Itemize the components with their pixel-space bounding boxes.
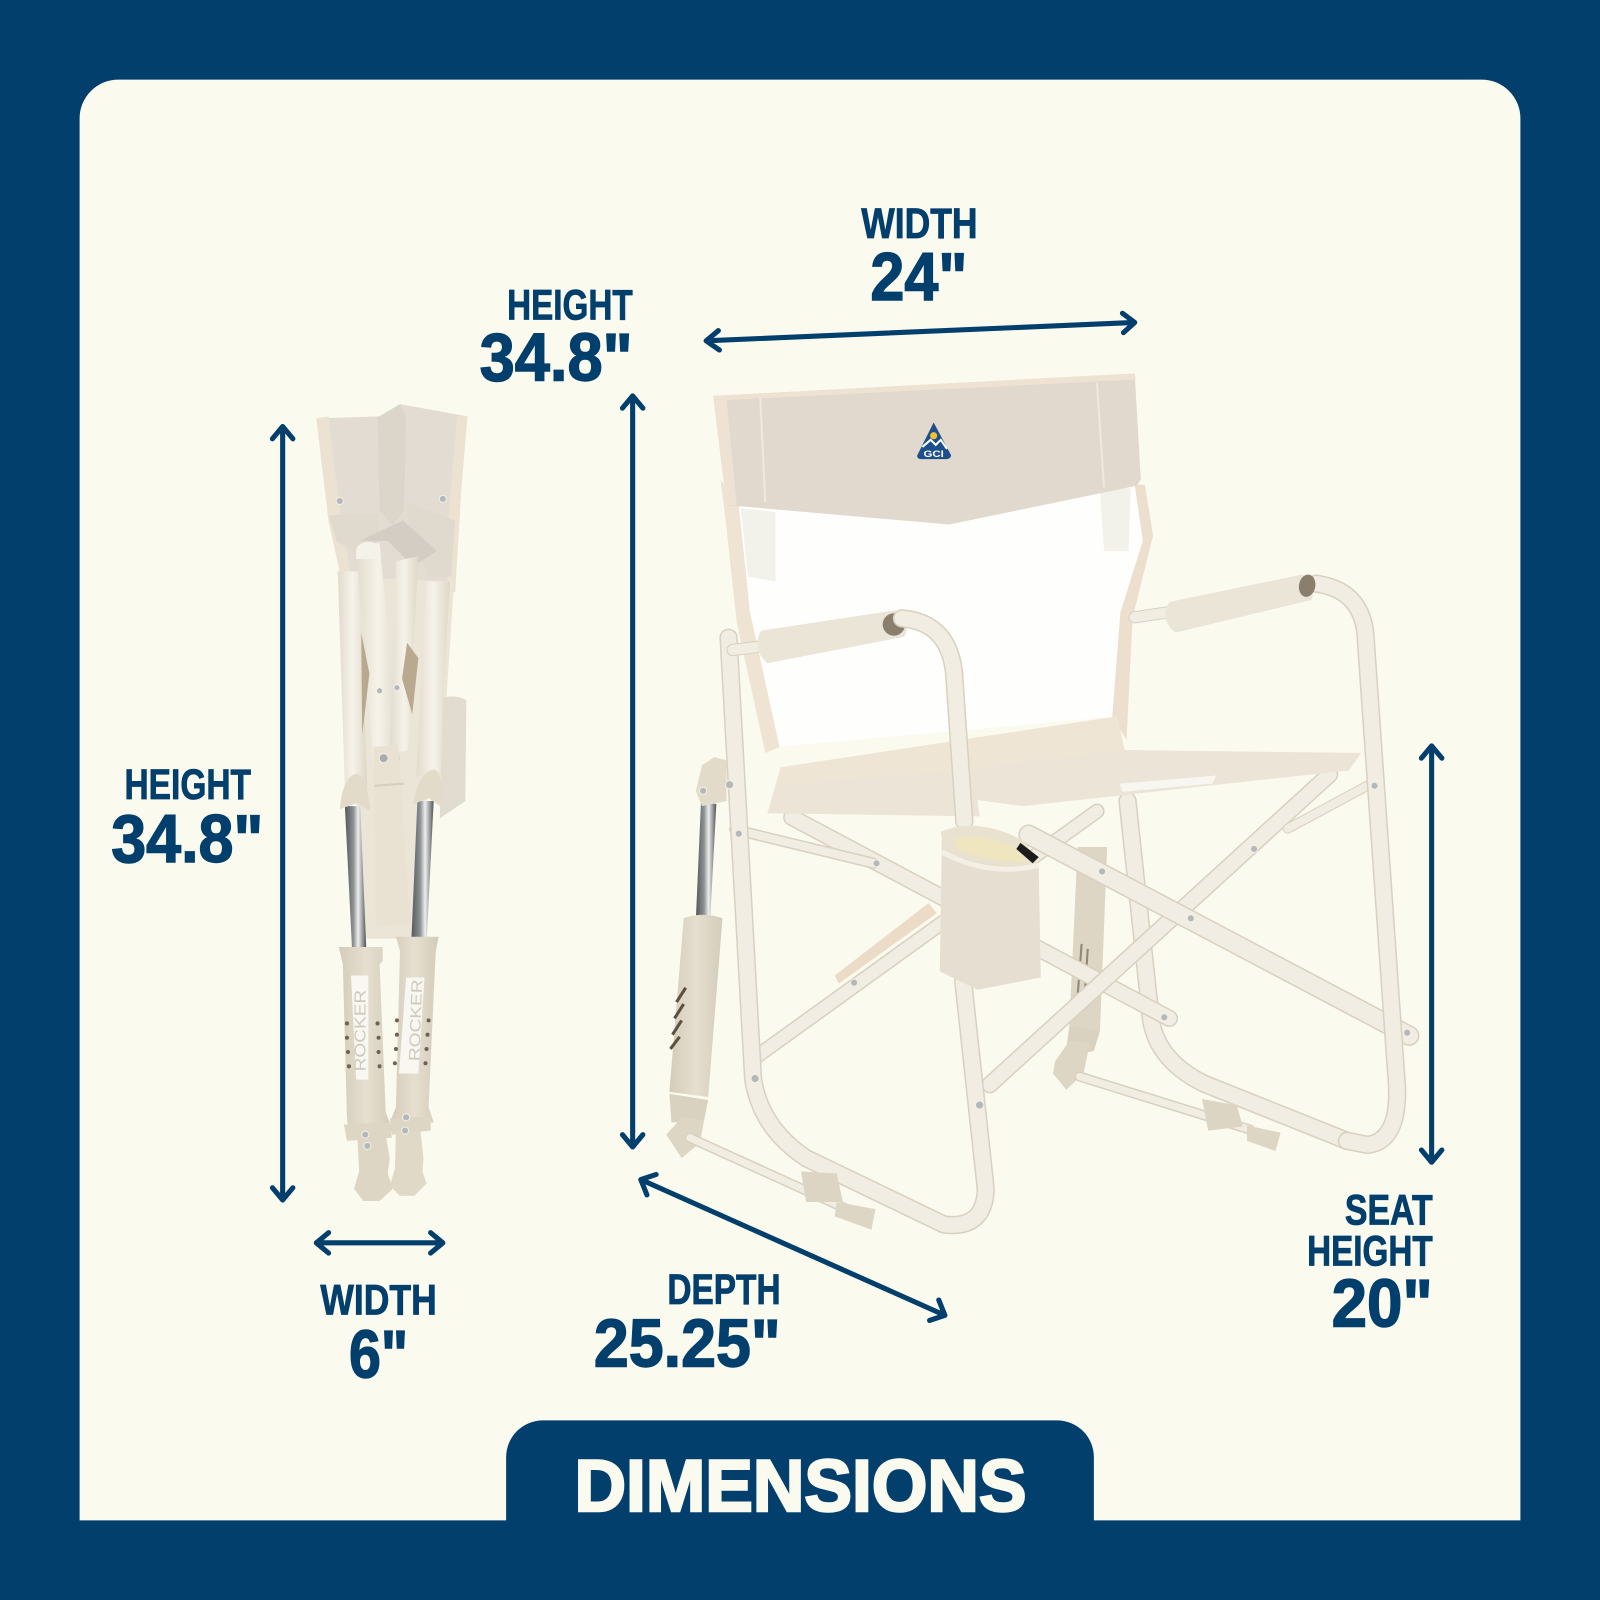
label: folded height: 34.8": [111, 802, 263, 877]
label: depth: [594, 1266, 781, 1381]
arrow: top width: [706, 313, 1135, 350]
back top canvas: [713, 373, 1141, 524]
label: folded width: 6": [349, 1318, 408, 1393]
folded steel rods: [345, 801, 434, 949]
label: top width: 24": [870, 240, 967, 315]
arrow: center height: [622, 396, 643, 1147]
folded collars: [340, 769, 443, 811]
label: seat height: SEAT: [1345, 1186, 1433, 1234]
label: folded height: HEIGHT: [124, 761, 251, 809]
folded rocker cylinders: [339, 937, 439, 1135]
folded strap: [373, 745, 410, 927]
label: top width: WIDTH: [861, 200, 978, 248]
bolts: [699, 781, 1411, 1109]
label: folded width: [320, 1276, 437, 1393]
banner: dimensions: DIMENSIONS: [574, 1444, 1027, 1527]
label: center height: 34.8": [480, 321, 633, 396]
folded fabric back: [316, 404, 467, 602]
back mesh: [737, 485, 1151, 747]
label: top width: [861, 200, 978, 315]
arrow: depth: [641, 1174, 945, 1320]
GCI logo: GCI: [923, 449, 944, 459]
label: depth: DEPTH: [667, 1266, 781, 1314]
chair open: [666, 373, 1411, 1230]
label: folded width: WIDTH: [320, 1276, 437, 1324]
folded rocker cylinders: ROCKER: [406, 979, 426, 1061]
back cross bars: [735, 811, 1169, 1056]
label: depth: 25.25": [594, 1306, 781, 1381]
label: seat height: HEIGHT: [1307, 1227, 1433, 1275]
canvas brace: [835, 903, 937, 984]
left steel rod: [696, 801, 716, 918]
left frame and rocker: [729, 638, 986, 1225]
rear cylinder: [1053, 847, 1107, 1090]
folded chair: [316, 404, 467, 1201]
folded rocker cylinders: ROCKER: [352, 990, 369, 1071]
arrow: seat height: [1421, 746, 1442, 1162]
rear foot bar: [1080, 1077, 1281, 1151]
left pivot: [696, 757, 727, 806]
label: center height: HEIGHT: [507, 281, 633, 329]
label: seat height: [1307, 1186, 1433, 1342]
label: folded height: [111, 761, 263, 877]
label: center height: [480, 281, 633, 396]
folded feet: [344, 1114, 431, 1201]
mesh side webbing: [720, 480, 1153, 753]
front cross bars: [990, 774, 1409, 1085]
seat: [767, 716, 1361, 816]
label: seat height: 20": [1332, 1267, 1433, 1342]
left rocker cylinder: [666, 915, 722, 1158]
folded cup holder: [440, 696, 466, 818]
front foot bar: [690, 1138, 876, 1230]
GCI logo: [917, 422, 951, 459]
banner: dimensions: [506, 1420, 1094, 1531]
right arm and front right leg: [1135, 573, 1397, 1145]
folded body fill: [339, 577, 454, 939]
front arm: [733, 610, 964, 821]
arrow: folded height: [272, 427, 293, 1200]
cup holder: [940, 826, 1041, 990]
folded frame tubes: [338, 542, 450, 788]
rear right leg and back rocker: [1128, 801, 1347, 1141]
arrow: folded width: [316, 1233, 443, 1253]
